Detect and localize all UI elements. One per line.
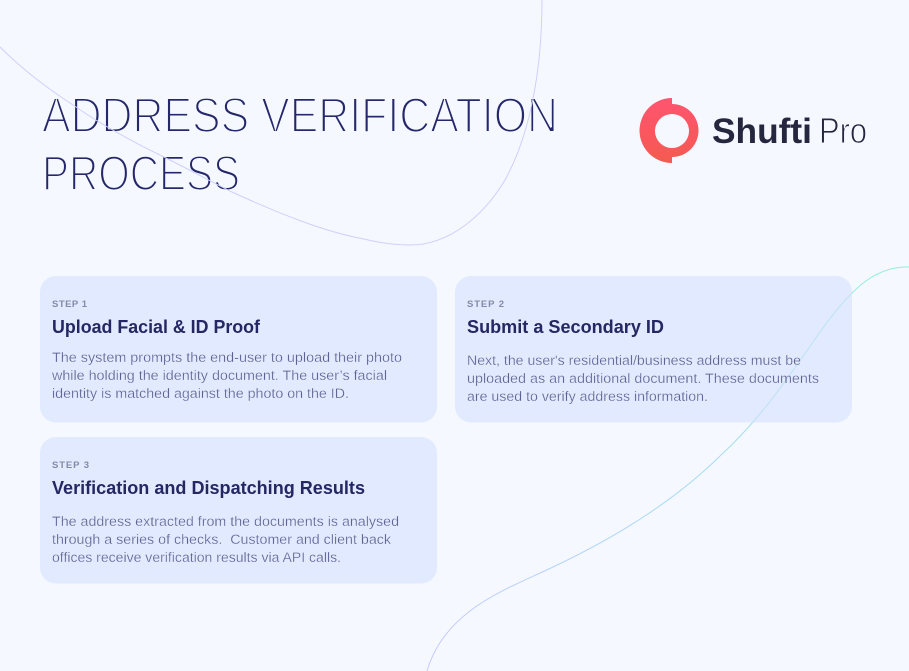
panel: step 2 [455, 276, 852, 422]
step 3 label: STEP 3 [52, 460, 89, 471]
title: ADDRESS VERIFICATION [42, 89, 558, 143]
title: PROCESS [42, 147, 240, 201]
icon: logo ring [640, 98, 698, 163]
step 1 text: identity is matched against the photo on the ID. [52, 386, 349, 402]
step 1 heading: Upload Facial & ID Proof [52, 317, 261, 337]
step 3 text: The address extracted from the documents is analysed [52, 514, 399, 530]
panel: step 3 [40, 437, 437, 584]
panel: step 1 [40, 276, 437, 422]
step 2 text: are used to verify address information. [467, 389, 708, 405]
logo wordmark: Pro: Pro [819, 110, 867, 151]
step 3 text: offices receive verification results via API calls. [52, 550, 341, 566]
step 1 label: STEP 1 [52, 299, 88, 310]
step 2 text [467, 353, 819, 405]
step 1 text: while holding the identity document. The user’s facial [51, 368, 387, 384]
step 3 text: through a series of checks. Customer and client back [52, 532, 392, 548]
step 1 text [51, 350, 402, 402]
step 3 text [52, 514, 399, 566]
step 3 heading: Verification and Dispatching Results [52, 478, 365, 498]
step 2 text: Next, the user's residential/business address must be [467, 353, 801, 369]
step 2 heading: Submit a Secondary ID [467, 317, 664, 337]
step 2 text: uploaded as an additional document. These documents [467, 371, 819, 387]
step 1 text: The system prompts the end-user to upload their photo [52, 350, 402, 366]
title [42, 89, 558, 201]
logo: Shufti Pro [640, 98, 867, 163]
logo wordmark: Shufti [712, 111, 812, 151]
step 2 label: STEP 2 [467, 299, 504, 310]
